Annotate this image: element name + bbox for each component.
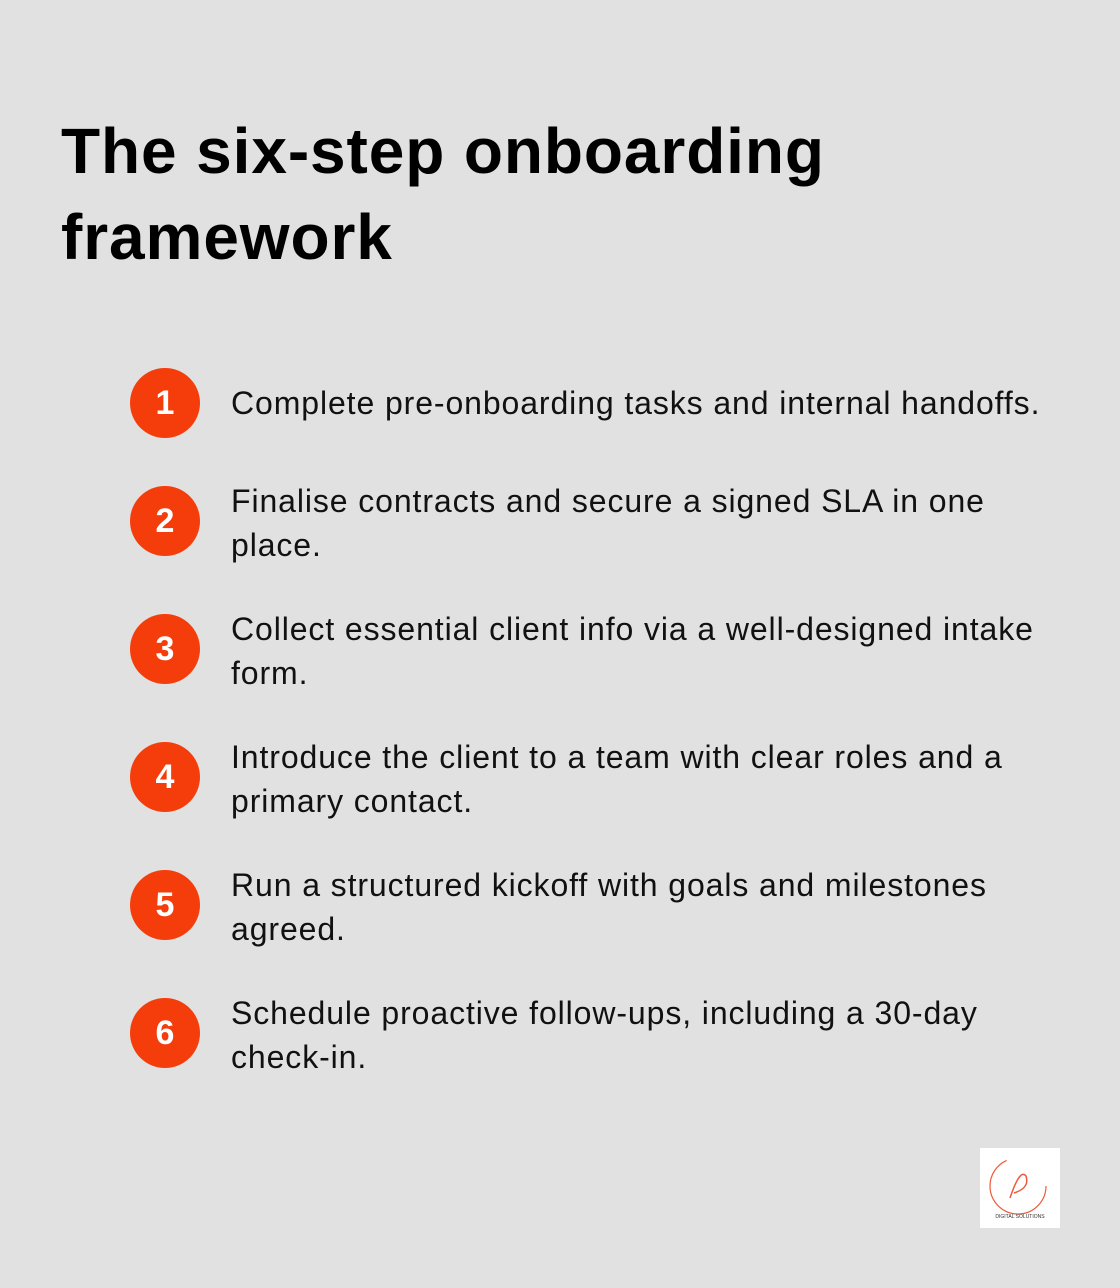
step 6: Schedule proactive follow-ups, including a 30-day [231,995,978,1031]
step 2: Finalise contracts and secure a signed SLA in one [231,483,985,519]
step 1: Complete pre-onboarding tasks and internal handoffs. [231,385,1040,421]
step 6: check-in. [231,1039,367,1075]
step 2: 2 [156,502,174,540]
step 6: 6 [156,1014,174,1052]
title [61,115,825,273]
step 3: 3 [156,630,174,668]
step 4 [130,739,1003,819]
logo [980,1148,1060,1228]
title: framework [61,201,393,273]
step 5: 5 [156,886,174,924]
step 4: Introduce the client to a team with clear roles and a [231,739,1003,775]
step 5: agreed. [231,911,346,947]
step 6 [130,995,978,1075]
step 1 [130,368,1040,438]
step 5: Run a structured kickoff with goals and milestones [231,867,987,903]
logo: DIGITAL SOLUTIONS [995,1214,1045,1220]
step 2 [130,483,985,563]
title: The six-step onboarding [61,115,825,187]
step 3 [130,611,1034,691]
step 4: 4 [156,758,174,796]
step 5 [130,867,987,947]
step 4: primary contact. [231,783,473,819]
step 3: form. [231,655,308,691]
step 1: 1 [156,384,174,422]
step 3: Collect essential client info via a well-designed intake [231,611,1034,647]
step 2: place. [231,527,322,563]
